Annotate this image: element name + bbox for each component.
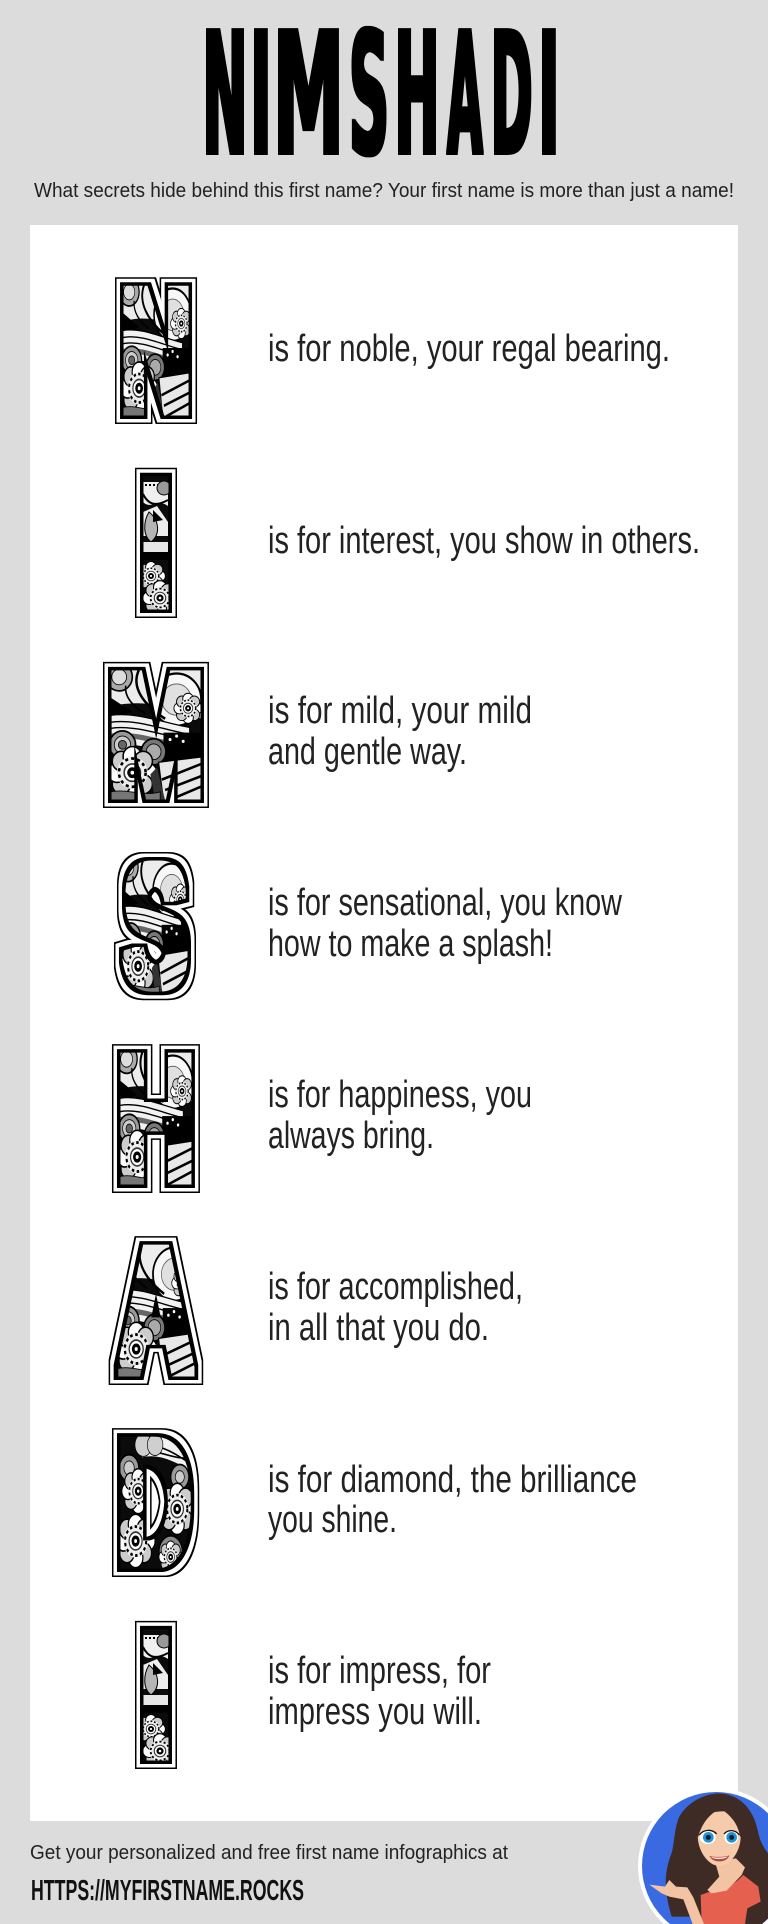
arm and hand (649, 1880, 704, 1924)
text: S lines (268, 882, 622, 965)
icon: decorated letter D: D (118, 1402, 191, 1603)
title: N (203, 0, 247, 194)
text: A lines (268, 1266, 523, 1349)
icon: decorated letter A: A (118, 1211, 194, 1412)
text: M lines: and gentle way. (268, 731, 467, 773)
hair (666, 1793, 768, 1924)
front hair (698, 1811, 741, 1837)
text: H lines: is for happiness, you (268, 1074, 532, 1116)
text: last I lines (268, 1650, 491, 1733)
title: I (538, 0, 560, 194)
footer text: Get your personalized and free first name infographics at (30, 1842, 508, 1864)
text: H lines: always bring. (268, 1115, 434, 1157)
text: H lines (268, 1074, 532, 1157)
icon: decorated letter S: S (124, 828, 187, 1023)
icon: decorated letter I (second) (135, 1620, 177, 1769)
title: I (250, 0, 272, 194)
panel: letters (30, 225, 738, 1821)
icon: decorated letter M: M (108, 636, 204, 833)
icon: decorated letter S (114, 852, 196, 1000)
icon: decorated letter D: D (118, 1402, 191, 1603)
icon: decorated letter I (second): I (140, 1596, 172, 1795)
text: M lines: is for mild, your mild (268, 690, 532, 732)
text: last I lines: is for impress, for (268, 1650, 491, 1692)
icon: decorated letter I: I (140, 441, 172, 645)
shirt (701, 1875, 761, 1924)
icon: decorated letter I: I (140, 441, 172, 645)
icon: decorated letter I (second): I (140, 1596, 172, 1795)
icon: decorated letter S: S (124, 828, 187, 1023)
icon: decorated letter M (103, 662, 209, 808)
face (698, 1811, 741, 1866)
icon: decorated letter N (115, 277, 198, 424)
icon: decorated letter M: M (108, 636, 204, 833)
title: S (349, 0, 389, 194)
text: D lines (268, 1459, 637, 1541)
neck and chest (707, 1858, 745, 1893)
mouth (709, 1855, 729, 1861)
left eye (700, 1831, 716, 1844)
subtitle: What secrets hide behind this first name? Your first name is more than just a name! (34, 180, 734, 202)
icon: decorated letter D (112, 1428, 200, 1577)
icon: decorated letter H: H (117, 1019, 195, 1219)
text: last I lines: impress you will. (268, 1691, 482, 1733)
icon: decorated letter N: N (121, 253, 191, 450)
icon: decorated letter S: S (124, 828, 187, 1023)
right eye (724, 1831, 738, 1844)
icon: decorated letter A: A (118, 1211, 194, 1412)
title: D (491, 0, 532, 194)
text: D lines: is for diamond, the brilliance (268, 1459, 637, 1501)
text: A lines: is for accomplished, (268, 1266, 523, 1308)
text: S lines: is for sensational, you know (268, 882, 622, 924)
icon: decorated letter N: N (121, 253, 191, 450)
footer url: HTTPS://MYFIRSTNAME.ROCKS (31, 1875, 304, 1907)
icon: decorated letter H: H (117, 1019, 195, 1219)
text: S lines: how to make a splash! (268, 923, 553, 965)
icon: decorated letter D: D (118, 1402, 191, 1603)
icon: decorated letter H: H (117, 1019, 195, 1219)
title: H (395, 0, 439, 194)
title (203, 0, 560, 194)
icon: decorated letter I (second): I (140, 1596, 172, 1795)
icon: decorated letter N: N (121, 253, 191, 450)
icon: decorated letter H (112, 1044, 200, 1193)
text: A lines: in all that you do. (268, 1307, 489, 1349)
icon: decorated letter M: M (108, 636, 204, 833)
icon: decorated letter I: I (140, 441, 172, 645)
icon: avatar (638, 1788, 768, 1924)
title: M (273, 0, 344, 194)
icon: decorated letter A: A (118, 1211, 194, 1412)
title: A (447, 0, 482, 194)
text: M lines (268, 690, 532, 773)
text: D lines: you shine. (268, 1499, 397, 1541)
icon: decorated letter A (108, 1236, 204, 1385)
icon: decorated letter I (135, 468, 177, 618)
